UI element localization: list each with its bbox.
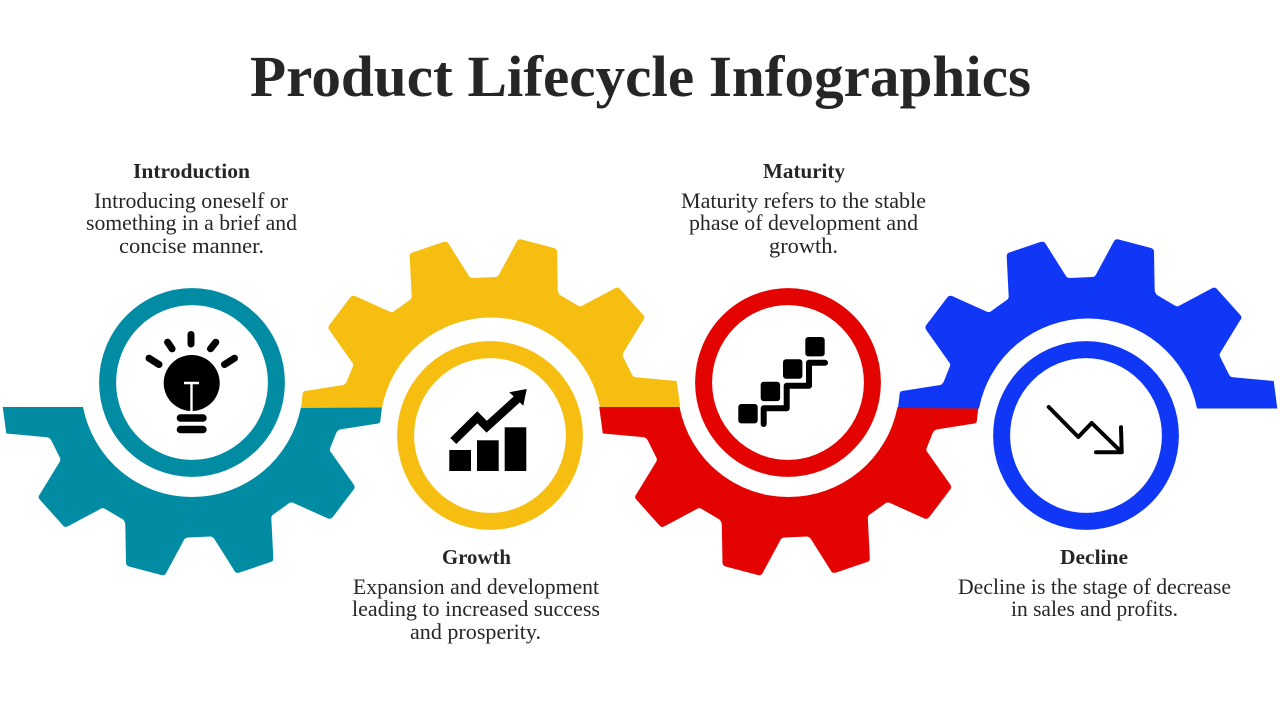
gear: yellow half gear — [301, 239, 680, 408]
text block: growth description — [352, 574, 600, 644]
panel: maturity stage — [599, 159, 978, 575]
gear: blue half gear — [898, 239, 1277, 408]
heading: Decline: Decline — [1060, 545, 1128, 569]
text block: maturity description — [681, 188, 926, 258]
text block: decline description — [958, 574, 1231, 621]
text block: maturity description: Maturity refers to the stable — [681, 188, 926, 213]
text block: introduction description — [86, 188, 297, 258]
heading: Maturity: Maturity — [763, 159, 845, 183]
panel: growth stage — [301, 239, 680, 644]
text block: maturity description: growth. — [769, 233, 838, 258]
icon: ascending steps — [738, 337, 825, 424]
text block: introduction description: Introducing oneself or — [94, 188, 289, 213]
ring: red circle — [704, 297, 872, 468]
text block: introduction description: something in a brief and — [86, 210, 297, 235]
ring: yellow circle — [406, 350, 574, 521]
text block: decline description: in sales and profits. — [1011, 596, 1178, 621]
heading: Growth: Growth — [442, 545, 511, 569]
text block: decline description: Decline is the stage of decrease — [958, 574, 1231, 599]
icon: growth chart — [449, 389, 527, 471]
ring: teal circle — [108, 297, 276, 468]
gear: red half gear — [599, 406, 978, 575]
icon: light bulb — [149, 334, 234, 433]
heading: Introduction: Introduction — [133, 159, 250, 183]
text block: growth description: and prosperity. — [410, 619, 541, 644]
text block: maturity description: phase of development and — [689, 210, 918, 235]
gear: teal half gear — [3, 406, 382, 575]
panel: introduction stage — [3, 159, 382, 575]
text block: growth description: leading to increased success — [352, 596, 600, 621]
text block: growth description: Expansion and development — [353, 574, 599, 599]
icon: declining arrow — [1049, 407, 1122, 452]
title: Product Lifecycle Infographics — [250, 44, 1031, 109]
text block: introduction description: concise manner. — [119, 233, 264, 258]
ring: blue circle — [1002, 350, 1170, 521]
panel: decline stage — [898, 239, 1277, 621]
